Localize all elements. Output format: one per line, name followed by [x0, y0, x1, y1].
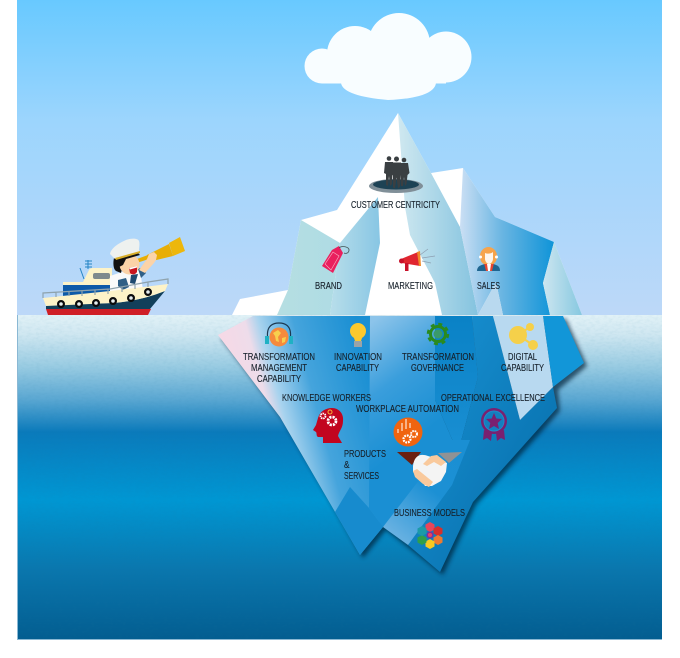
label: digital capability: CAPABILITY — [501, 363, 544, 374]
label: sales: SALES — [477, 281, 500, 292]
label: innovation capability — [334, 352, 382, 374]
label: transformation governance — [402, 352, 474, 374]
label: transformation management capability — [243, 352, 315, 385]
boat portholes — [58, 289, 151, 307]
icon: innovation bulb — [350, 323, 366, 347]
icon: knowledge head with gears — [313, 408, 343, 443]
sea background — [17, 315, 662, 640]
label: knowledge workers: KNOWLEDGE WORKERS — [282, 393, 371, 404]
label: transformation management capability: CAPABILITY — [257, 374, 301, 385]
sky background — [17, 0, 662, 316]
label: transformation governance: TRANSFORMATION — [402, 352, 474, 363]
icon: business models hexagons — [418, 522, 442, 549]
icon: marketing megaphone — [399, 249, 435, 271]
icon: boat with captain — [43, 237, 185, 315]
boat rail — [43, 279, 168, 298]
icon: brand tag — [322, 246, 349, 273]
iceberg above water — [232, 113, 582, 315]
label: products and services: SERVICES — [344, 471, 379, 482]
label: innovation capability: INNOVATION — [334, 352, 382, 363]
boat antenna — [80, 260, 92, 279]
boat hull — [43, 284, 168, 315]
label: innovation capability: CAPABILITY — [336, 363, 379, 374]
label: marketing: MARKETING — [388, 281, 433, 292]
icon: transformation governance gear — [428, 324, 448, 344]
label: business models: BUSINESS MODELS — [394, 508, 465, 519]
label: transformation management capability: TRANSFORMATION — [243, 352, 315, 363]
label: digital capability — [501, 352, 544, 374]
icon: workplace automation circle — [394, 418, 422, 446]
label: brand: BRAND — [315, 281, 342, 292]
label: customer centricity: CUSTOMER CENTRICITY — [351, 200, 440, 211]
icon: handshake — [397, 452, 462, 487]
label: products and services — [344, 449, 386, 482]
boat cabin — [63, 268, 112, 299]
label: products and services: PRODUCTS — [344, 449, 386, 460]
icon: sales person — [477, 247, 500, 271]
label: transformation governance: GOVERNANCE — [411, 363, 464, 374]
icon: customer centricity — [369, 156, 423, 193]
label: workplace automation: WORKPLACE AUTOMATION — [356, 404, 459, 415]
label: digital capability: DIGITAL — [508, 352, 537, 363]
icon: operational excellence medal — [481, 408, 507, 441]
cloud — [304, 13, 472, 100]
captain — [110, 239, 157, 297]
label: products and services: & — [344, 460, 350, 471]
iceberg below water — [218, 316, 587, 575]
label: transformation management capability: MANAGEMENT — [251, 363, 307, 374]
label: operational excellence: OPERATIONAL EXCELLENCE — [441, 393, 545, 404]
icon: transformation management headset globe — [265, 323, 293, 346]
icon: digital share nodes — [509, 323, 538, 350]
telescope — [137, 237, 185, 262]
